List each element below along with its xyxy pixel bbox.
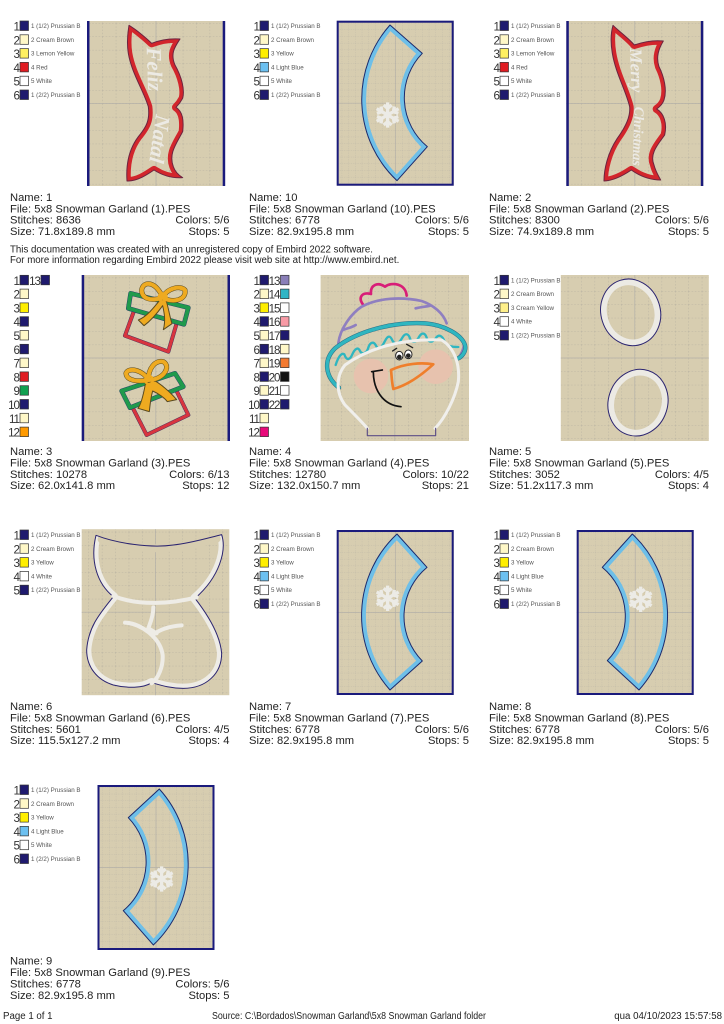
design 4 stats: Size: 132.0x150.7 mm — [249, 480, 360, 492]
colour legend 4: 18 — [269, 344, 280, 357]
footer: Source: C:\Bordados\Snowman Garland\5x8 Snowman Garland folder — [212, 1011, 487, 1022]
design 5 stats — [489, 446, 709, 492]
embroidery canvas: snowman body — [82, 529, 229, 695]
design 4 stats: Stops: 21 — [422, 480, 469, 492]
colour legend 3: 4 — [14, 316, 21, 329]
colour legend 4: 1 — [254, 275, 260, 288]
colour legend 3: 12 — [8, 427, 20, 440]
embroidery canvas: Feliz Natal ribbon: Natal — [144, 112, 175, 165]
smile — [372, 370, 401, 407]
colour legend 7: 4 Light Blue — [271, 573, 304, 580]
colour legend 6: 4 — [14, 571, 21, 584]
design 4 stats: File: 5x8 Snowman Garland (4).PES — [249, 457, 429, 469]
colour legend 3: 11 — [9, 413, 20, 426]
panel: design 2 — [489, 20, 709, 238]
colour legend 1: 5 White — [31, 78, 53, 85]
colour legend 4: 22 — [269, 399, 280, 412]
colour legend 5: 1 (1/2) Prussian B — [511, 277, 561, 284]
colour legend 6: 2 Cream Brown — [31, 546, 75, 553]
panel: design 5 — [489, 271, 709, 492]
bottom gift — [122, 361, 188, 435]
embroidery canvas: Merry Christmas ribbon: Merry — [626, 47, 647, 93]
colour legend 7: 1 (2/2) Prussian B — [271, 601, 321, 608]
colour legend 7: 3 Yellow — [271, 560, 294, 567]
design 7 stats: Stops: 5 — [428, 735, 469, 747]
colour legend 9: 3 — [14, 812, 20, 825]
colour legend 9: 1 (2/2) Prussian B — [31, 856, 81, 863]
colour legend 4 — [248, 275, 289, 440]
colour legend 7: 5 White — [271, 587, 293, 594]
colour legend 5: 4 — [494, 316, 501, 329]
embroidery canvas: two ovals — [561, 271, 709, 444]
colour legend 5: 1 (2/2) Prussian B — [511, 332, 561, 339]
design 4 stats — [249, 446, 469, 492]
design 8 stats: Size: 82.9x195.8 mm — [489, 735, 594, 747]
colour legend 4: 11 — [249, 413, 260, 426]
colour legend 1 — [14, 20, 81, 102]
design 9 stats: Stops: 5 — [188, 990, 230, 1002]
colour legend 4: 4 — [254, 316, 261, 329]
colour legend 1: 3 Lemon Yellow — [31, 51, 75, 58]
design 5 stats: Stops: 4 — [668, 480, 709, 492]
embroidery canvas: Feliz Natal ribbon — [87, 21, 225, 186]
colour legend 3: 10 — [8, 399, 20, 412]
colour legend 8: 2 — [494, 543, 500, 556]
design 10 stats: Name: 10 — [249, 192, 298, 204]
design 3 stats: Size: 62.0x141.8 mm — [10, 480, 115, 492]
colour legend 7 — [254, 530, 321, 612]
footer — [3, 1011, 722, 1022]
embroidery canvas: curved band with snowflake — [577, 530, 694, 695]
panel: design 3 — [8, 275, 230, 492]
colour legend 10: 1 (1/2) Prussian B — [271, 23, 321, 30]
colour legend 3 — [8, 275, 50, 440]
design 1 stats — [10, 192, 230, 238]
colour legend 8: 1 (1/2) Prussian B — [511, 532, 561, 539]
design 10 stats — [249, 192, 469, 238]
embroidery canvas: Feliz Natal ribbon: Feliz — [142, 46, 167, 92]
colour legend 7: 2 Cream Brown — [271, 546, 315, 553]
colour legend 9: 2 — [14, 798, 20, 811]
colour legend 4: 14 — [269, 289, 281, 302]
colour legend 10: 2 — [254, 34, 260, 47]
nose — [391, 363, 433, 389]
design 5 stats: Stitches: 3052 — [489, 469, 560, 481]
colour legend 4: 12 — [248, 427, 260, 440]
colour legend 4: 15 — [269, 302, 280, 315]
colour legend 8: 4 — [494, 571, 501, 584]
colour legend 3: 13 — [29, 275, 41, 288]
colour legend 6: 1 (1/2) Prussian B — [31, 532, 81, 539]
design 9 stats: Name: 9 — [10, 956, 52, 968]
design 8 stats: Stitches: 6778 — [489, 724, 560, 736]
colour legend 4: 3 — [254, 302, 260, 315]
colour legend 4: 21 — [269, 385, 280, 398]
colour legend 8: 4 Light Blue — [511, 573, 544, 580]
colour legend 8: 3 — [494, 557, 500, 570]
design 2 stats: File: 5x8 Snowman Garland (2).PES — [489, 203, 669, 215]
colour legend 6: 5 — [14, 585, 20, 598]
design 3 stats: Stitches: 10278 — [10, 469, 87, 481]
colour legend 5: 1 — [494, 275, 500, 288]
colour legend 8: 2 Cream Brown — [511, 546, 555, 553]
design 10 stats: Stops: 5 — [428, 226, 469, 238]
colour legend 1: 6 — [14, 90, 20, 102]
colour legend 1: 4 Red — [31, 64, 48, 71]
colour legend 4: 8 — [254, 371, 260, 384]
colour legend 9: 3 Yellow — [31, 815, 54, 822]
colour legend 3: 8 — [14, 371, 20, 384]
colour legend 10: 1 (2/2) Prussian B — [271, 92, 321, 99]
colour legend 7: 2 — [254, 543, 260, 556]
colour legend 10: 3 — [254, 48, 260, 61]
colour legend 5 — [494, 275, 561, 343]
colour legend 5: 4 White — [511, 319, 533, 326]
design 4 stats: Colors: 10/22 — [402, 469, 469, 481]
colour legend 9: 6 — [14, 854, 20, 866]
design 7 stats: Stitches: 6778 — [249, 724, 320, 736]
design 9 stats: Size: 82.9x195.8 mm — [10, 990, 115, 1002]
colour legend 2: 5 — [494, 76, 500, 89]
design 1 stats: Name: 1 — [10, 192, 52, 204]
embroidery canvas: curved band with snowflake — [337, 21, 454, 186]
design 6 stats: Stitches: 5601 — [10, 724, 81, 736]
colour legend 4: 20 — [269, 371, 280, 384]
footer: Page 1 of 1 — [3, 1011, 53, 1022]
colour legend 2: 1 (2/2) Prussian B — [511, 92, 561, 99]
colour legend 8: 5 — [494, 585, 500, 598]
design 2 stats — [489, 192, 709, 238]
colour legend 3: 6 — [14, 344, 20, 357]
design 6 stats: Size: 115.5x127.2 mm — [10, 735, 120, 747]
design 2 stats: Stops: 5 — [668, 226, 709, 238]
colour legend 10 — [254, 20, 321, 102]
face outline — [338, 340, 459, 428]
colour legend 3: 2 — [14, 289, 20, 302]
colour legend 3: 1 — [14, 275, 20, 288]
colour legend 10: 1 — [254, 20, 260, 34]
colour legend 8: 6 — [494, 598, 500, 612]
colour legend 4: 7 — [254, 358, 260, 371]
colour legend 4: 5 — [254, 330, 260, 343]
design 4 stats: Name: 4 — [249, 446, 291, 458]
panel: design 6 — [10, 529, 230, 747]
colour legend 3: 9 — [14, 385, 20, 398]
colour legend 6: 1 — [14, 530, 20, 542]
colour legend 1: 3 — [14, 48, 20, 61]
cheeks — [354, 349, 453, 393]
colour legend 5: 3 Cream Yellow — [511, 305, 555, 312]
software notice — [10, 244, 399, 266]
design 6 stats: Colors: 4/5 — [175, 724, 230, 736]
panel: design 7 — [249, 530, 469, 747]
design 6 stats: File: 5x8 Snowman Garland (6).PES — [10, 712, 190, 724]
design 8 stats: Colors: 5/6 — [655, 724, 709, 736]
colour legend 8: 3 Yellow — [511, 560, 534, 567]
colour legend 9: 5 White — [31, 842, 53, 849]
hat band — [327, 323, 465, 388]
design 8 stats: File: 5x8 Snowman Garland (8).PES — [489, 712, 669, 724]
design 6 stats: Stops: 4 — [188, 735, 230, 747]
colour legend 9: 1 — [14, 784, 20, 798]
colour legend 10: 5 — [254, 76, 260, 89]
design 1 stats: Colors: 5/6 — [175, 215, 230, 227]
colour legend 7: 3 — [254, 557, 260, 570]
colour legend 9: 1 (1/2) Prussian B — [31, 787, 81, 794]
design 2 stats: Colors: 5/6 — [655, 215, 709, 227]
panel: design 9 — [10, 784, 230, 1002]
design 9 stats — [10, 956, 230, 1002]
hat — [338, 299, 464, 358]
colour legend 6: 1 (2/2) Prussian B — [31, 587, 81, 594]
colour legend 1: 1 — [14, 20, 20, 34]
colour legend 2: 3 Lemon Yellow — [511, 51, 555, 58]
colour legend 2: 2 Cream Brown — [511, 37, 555, 44]
colour legend 6: 2 — [14, 543, 20, 556]
software notice: This documentation was created with an unregistered copy of Embird 2022 software. — [10, 244, 373, 256]
colour legend 10: 5 White — [271, 78, 293, 85]
colour legend 6: 3 Yellow — [31, 560, 54, 567]
colour legend 4: 19 — [269, 358, 280, 371]
colour legend 4: 13 — [269, 275, 280, 288]
colour legend 1: 5 — [14, 76, 20, 89]
colour legend 2: 2 — [494, 34, 500, 47]
colour legend 2: 5 White — [511, 78, 533, 85]
design 3 stats: File: 5x8 Snowman Garland (3).PES — [10, 457, 190, 469]
design 2 stats: Stitches: 8300 — [489, 215, 560, 227]
design 10 stats: File: 5x8 Snowman Garland (10).PES — [249, 203, 436, 215]
design 5 stats: Colors: 4/5 — [655, 469, 709, 481]
software notice: For more information regarding Embird 2022 please visit web site at http://www.embird.net. — [10, 255, 399, 266]
colour legend 2 — [494, 20, 561, 102]
embroidery canvas: two gift boxes — [82, 275, 230, 441]
colour legend 8: 1 (2/2) Prussian B — [511, 601, 561, 608]
embroidery canvas: Merry Christmas ribbon — [566, 21, 703, 186]
design 1 stats: Stops: 5 — [188, 226, 230, 238]
colour legend 9: 2 Cream Brown — [31, 801, 75, 808]
design 10 stats: Size: 82.9x195.8 mm — [249, 226, 354, 238]
colour legend 1: 2 — [14, 34, 20, 47]
design 7 stats: File: 5x8 Snowman Garland (7).PES — [249, 712, 429, 724]
design 8 stats: Name: 8 — [489, 701, 531, 713]
colour legend 4: 16 — [269, 316, 280, 329]
colour legend 4: 6 — [254, 344, 260, 357]
colour legend 9: 5 — [14, 840, 20, 853]
colour legend 4: 9 — [254, 385, 260, 398]
design 2 stats: Name: 2 — [489, 192, 531, 204]
colour legend 6: 3 — [14, 557, 20, 570]
design 5 stats: Size: 51.2x117.3 mm — [489, 480, 593, 492]
design 8 stats — [489, 701, 709, 747]
colour legend 10: 6 — [254, 90, 260, 102]
colour legend 10: 4 — [254, 62, 261, 75]
colour legend 8 — [494, 530, 561, 612]
design 9 stats: File: 5x8 Snowman Garland (9).PES — [10, 967, 190, 979]
colour legend 2: 4 Red — [511, 64, 528, 71]
design 3 stats: Stops: 12 — [182, 480, 230, 492]
embroidery canvas: curved band with snowflake — [98, 785, 214, 950]
colour legend 7: 4 — [254, 571, 261, 584]
colour legend 2: 1 — [494, 20, 500, 34]
colour legend 1: 1 (2/2) Prussian B — [31, 92, 81, 99]
design 7 stats: Name: 7 — [249, 701, 291, 713]
colour legend 2: 4 — [494, 62, 501, 75]
colour legend 5: 5 — [494, 330, 500, 343]
colour legend 9: 4 — [14, 826, 21, 839]
design 6 stats: Name: 6 — [10, 701, 52, 713]
colour legend 9 — [14, 784, 81, 866]
colour legend 5: 2 Cream Brown — [511, 291, 555, 298]
colour legend 4: 17 — [269, 330, 280, 343]
panel: design 1 — [10, 20, 230, 238]
colour legend 5: 3 — [494, 302, 500, 315]
colour legend 3: 7 — [14, 358, 20, 371]
panel: design 4 — [248, 275, 469, 492]
colour legend 4: 2 — [254, 289, 260, 302]
colour legend 2: 6 — [494, 90, 500, 102]
design 3 stats: Name: 3 — [10, 446, 52, 458]
colour legend 1: 4 — [14, 62, 21, 75]
design 9 stats: Stitches: 6778 — [10, 978, 81, 990]
colour legend 6 — [14, 530, 81, 598]
design 7 stats — [249, 701, 469, 747]
embroidery canvas: snowman head — [321, 275, 469, 441]
embroidery canvas: curved band with snowflake — [337, 530, 454, 695]
design 1 stats: Size: 71.8x189.8 mm — [10, 226, 115, 238]
design 1 stats: File: 5x8 Snowman Garland (1).PES — [10, 203, 190, 215]
footer: qua 04/10/2023 15:57:58 — [614, 1011, 722, 1022]
colour legend 7: 1 (1/2) Prussian B — [271, 532, 321, 539]
design 9 stats: Colors: 5/6 — [175, 978, 230, 990]
design 3 stats: Colors: 6/13 — [169, 469, 230, 481]
colour legend 5: 2 — [494, 289, 500, 302]
colour legend 6: 4 White — [31, 573, 53, 580]
design 2 stats: Size: 74.9x189.8 mm — [489, 226, 594, 238]
colour legend 2: 1 (1/2) Prussian B — [511, 23, 561, 30]
top gift — [125, 284, 188, 352]
colour legend 10: 2 Cream Brown — [271, 37, 315, 44]
design 7 stats: Size: 82.9x195.8 mm — [249, 735, 354, 747]
pom-pom — [361, 284, 407, 305]
colour legend 7: 6 — [254, 598, 260, 612]
design 1 stats: Stitches: 8636 — [10, 215, 81, 227]
colour legend 7: 1 — [254, 530, 260, 542]
colour legend 9: 4 Light Blue — [31, 828, 64, 835]
colour legend 10: 4 Light Blue — [271, 64, 304, 71]
colour legend 2: 3 — [494, 48, 500, 61]
design 5 stats: Name: 5 — [489, 446, 531, 458]
colour legend 4: 10 — [248, 399, 260, 412]
eyes — [393, 344, 413, 360]
design 8 stats: Stops: 5 — [668, 735, 709, 747]
design 10 stats: Colors: 5/6 — [415, 215, 469, 227]
design 5 stats: File: 5x8 Snowman Garland (5).PES — [489, 457, 669, 469]
design 7 stats: Colors: 5/6 — [415, 724, 469, 736]
colour legend 1: 2 Cream Brown — [31, 37, 75, 44]
colour legend 7: 5 — [254, 585, 260, 598]
design 3 stats — [10, 446, 230, 492]
panel: design 8 — [489, 530, 709, 747]
design 4 stats: Stitches: 12780 — [249, 469, 326, 481]
colour legend 10: 3 Yellow — [271, 51, 294, 58]
colour legend 1: 1 (1/2) Prussian B — [31, 23, 81, 30]
colour legend 3: 5 — [14, 330, 20, 343]
embroidery canvas: Merry Christmas ribbon: Christmas — [629, 107, 646, 167]
panel: design 10 — [249, 20, 469, 238]
colour legend 8: 1 — [494, 530, 500, 542]
colour legend 8: 5 White — [511, 587, 533, 594]
design 10 stats: Stitches: 6778 — [249, 215, 320, 227]
colour legend 3: 3 — [14, 302, 20, 315]
design 6 stats — [10, 701, 230, 747]
